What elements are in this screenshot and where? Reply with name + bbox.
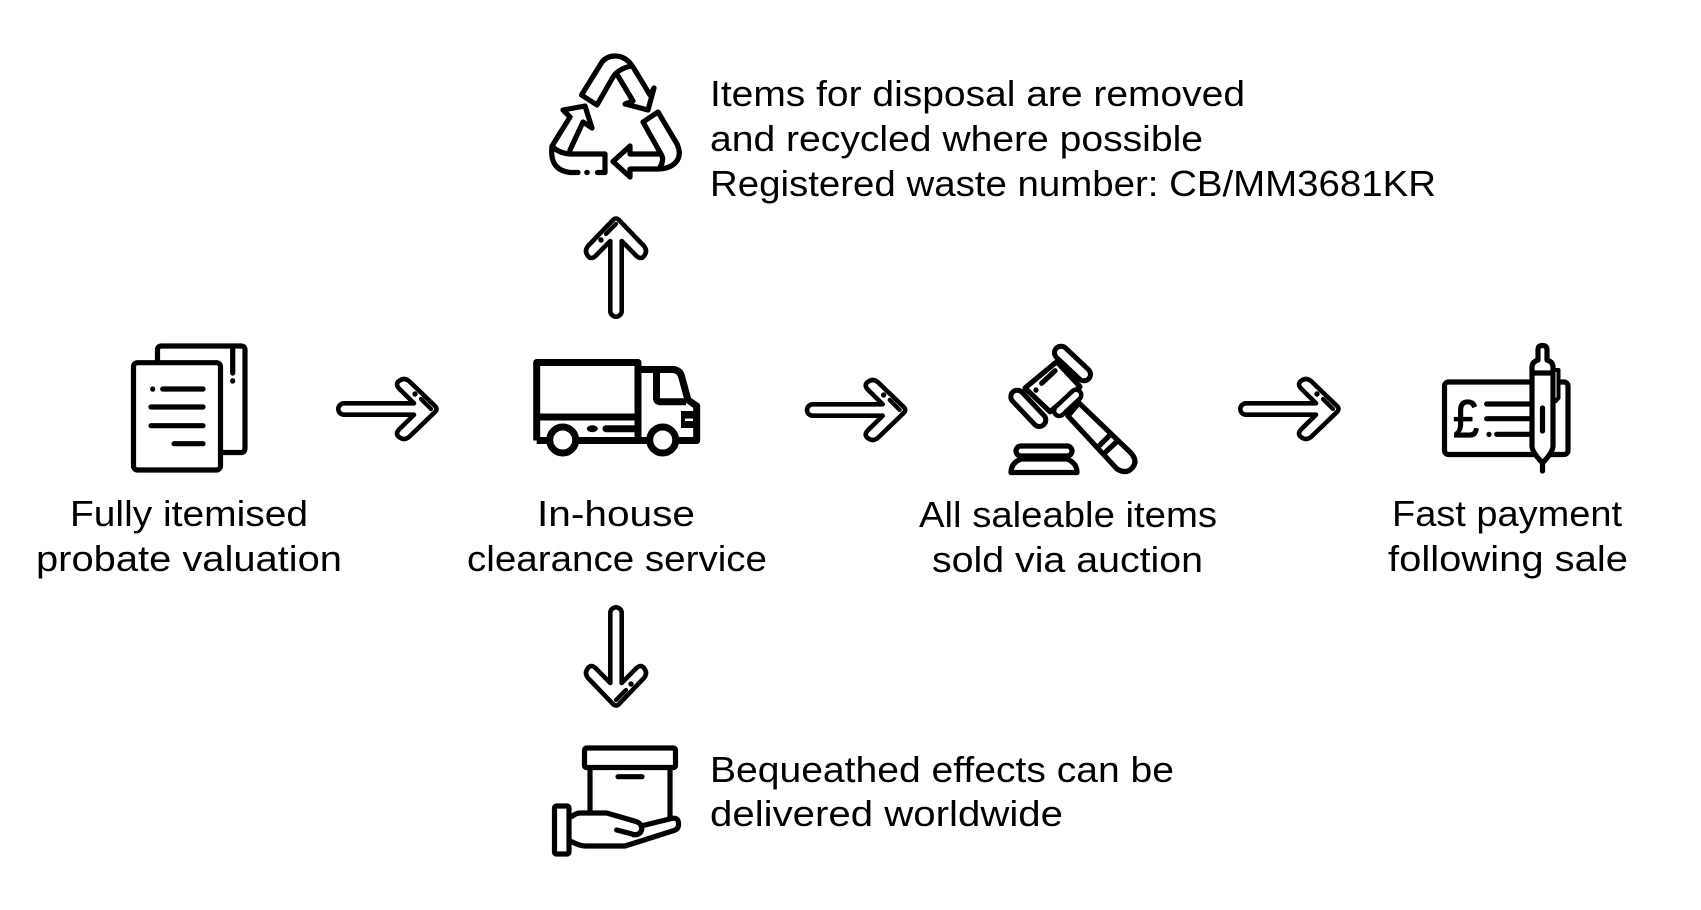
text: sold via auction: All saleable items: [919, 494, 1217, 535]
text: disposal and recycling: [710, 73, 1436, 204]
text: fast payment: [1388, 493, 1628, 579]
arrow: down to delivery: [586, 607, 646, 706]
text: disposal and recycling: Items for disposal are removed: [710, 73, 1245, 114]
icon: box on open hand: [554, 748, 679, 854]
icon: truck: [537, 362, 697, 453]
text: fast payment: Fast payment: [1392, 493, 1622, 534]
text: sold via auction: sold via auction: [932, 539, 1203, 580]
text: clearance service: clearance service: [467, 538, 767, 579]
text: worldwide delivery: [710, 749, 1174, 834]
text: fast payment: following sale: [1388, 538, 1628, 579]
arrow: valuation to clearance: [338, 379, 436, 439]
text: clearance service: [467, 493, 767, 579]
text: worldwide delivery: delivered worldwide: [710, 793, 1063, 834]
text: disposal and recycling: Registered waste number: CB/MM3681KR: [710, 163, 1436, 204]
text: worldwide delivery: Bequeathed effects can be: [710, 749, 1174, 790]
text: clearance service: In-house: [537, 493, 695, 534]
text: probate valuation: probate valuation: [36, 538, 342, 579]
arrow: clearance to auction: [807, 380, 905, 440]
icon: gavel: [1011, 353, 1135, 472]
text: disposal and recycling: and recycled where possible: [710, 118, 1203, 159]
icon: cheque and pen: [1444, 346, 1568, 471]
text: probate valuation: Fully itemised: [70, 493, 308, 534]
text: sold via auction: [919, 494, 1217, 580]
icon: recycling symbol: [552, 56, 679, 177]
icon: documents: [134, 346, 245, 470]
icon: cheque and pen: £: [1453, 390, 1479, 449]
text: probate valuation: [36, 493, 342, 579]
arrow: auction to payment: [1240, 379, 1338, 439]
arrow: up to recycling: [586, 218, 646, 317]
